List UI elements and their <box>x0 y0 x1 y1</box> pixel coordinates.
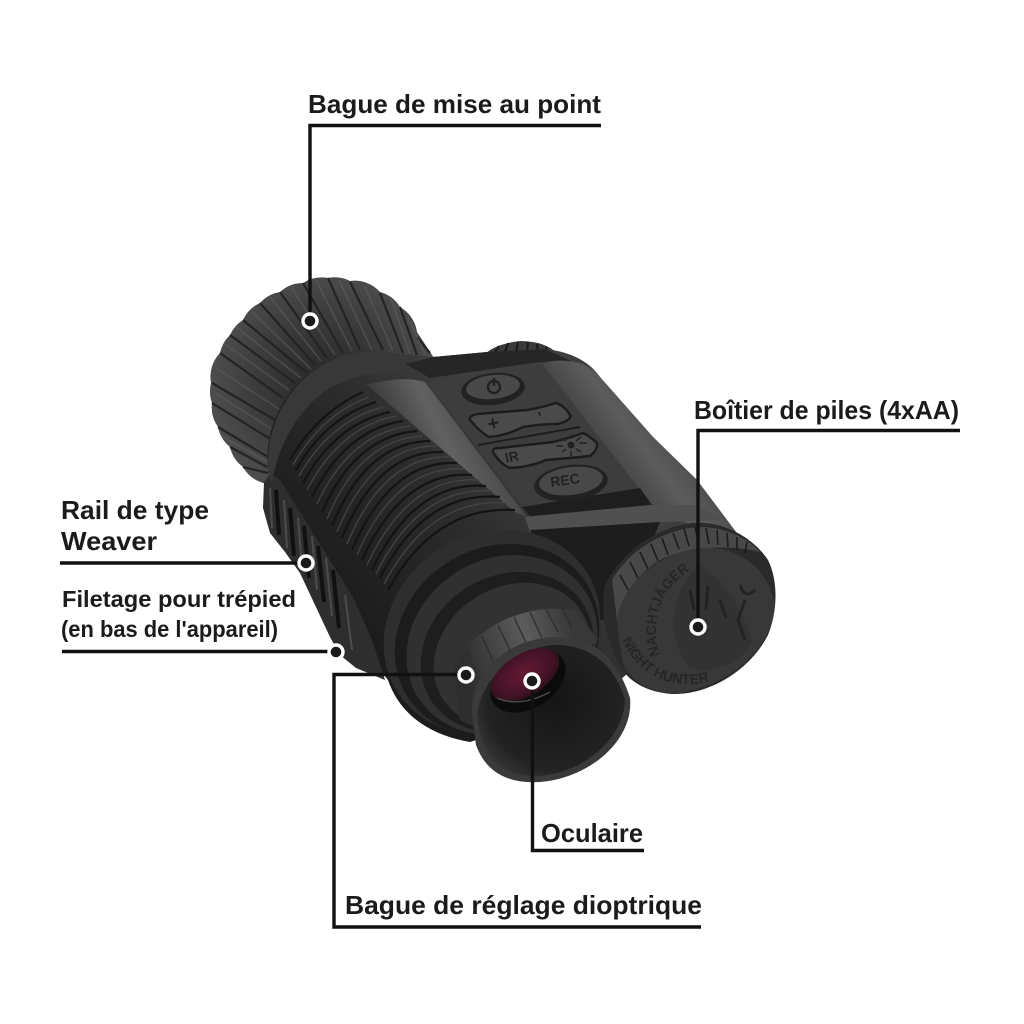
grip ridges <box>290 392 515 590</box>
light barrel strip <box>367 379 527 517</box>
IR button <box>493 433 597 468</box>
lower frame band <box>525 505 720 532</box>
red lens <box>479 636 577 726</box>
callout: Filetage pour trépied: (en bas de l'appareil) <box>61 616 278 642</box>
battery housing side <box>542 361 742 540</box>
REC button: REC <box>549 470 581 490</box>
callout: Rail de type Weaver <box>60 495 313 570</box>
callout: Filetage pour trépied <box>61 586 343 659</box>
callout: Bague de mise au point <box>303 89 601 328</box>
callout: Rail de type Weaver: Rail de type <box>61 495 209 525</box>
cap engraved text: NACHTJÄGER <box>646 564 690 656</box>
callout: Oculaire <box>525 674 644 850</box>
focus ring <box>210 277 434 484</box>
control plate <box>427 366 652 516</box>
eyepiece collars <box>345 490 639 774</box>
callout: Boîtier de piles <box>691 395 960 634</box>
callout: Bague de réglage dioptrique: Bague de réglage dioptrique <box>345 890 702 920</box>
plus minus button: - <box>531 408 549 419</box>
callout: Oculaire: Oculaire <box>541 818 643 848</box>
callout: Boîtier de piles: Boîtier de piles (4xAA) <box>694 395 959 425</box>
plus minus button <box>470 403 570 437</box>
callout: Bague de mise au point: Bague de mise au point <box>308 89 601 119</box>
night vision monocular <box>210 277 776 782</box>
rear ring <box>485 341 558 354</box>
weaver rail <box>263 474 385 680</box>
body <box>267 349 742 742</box>
IR button: IR <box>503 447 520 466</box>
deer engraving <box>690 585 755 640</box>
cap engraved text: NIGHT HUNTER <box>622 636 709 684</box>
callout: Bague de réglage dioptrique <box>334 668 702 927</box>
cap engraved text <box>622 564 709 684</box>
callout: Filetage pour trépied: Filetage pour trépied <box>62 586 296 612</box>
REC button <box>532 461 610 505</box>
callout: Rail de type Weaver: Weaver <box>61 526 157 556</box>
power button <box>460 370 526 408</box>
eyepiece tube <box>453 609 598 735</box>
plus minus button: + <box>485 412 501 436</box>
rubber eyecup <box>472 637 630 782</box>
main barrel lip <box>268 352 430 482</box>
battery cap <box>603 522 776 694</box>
